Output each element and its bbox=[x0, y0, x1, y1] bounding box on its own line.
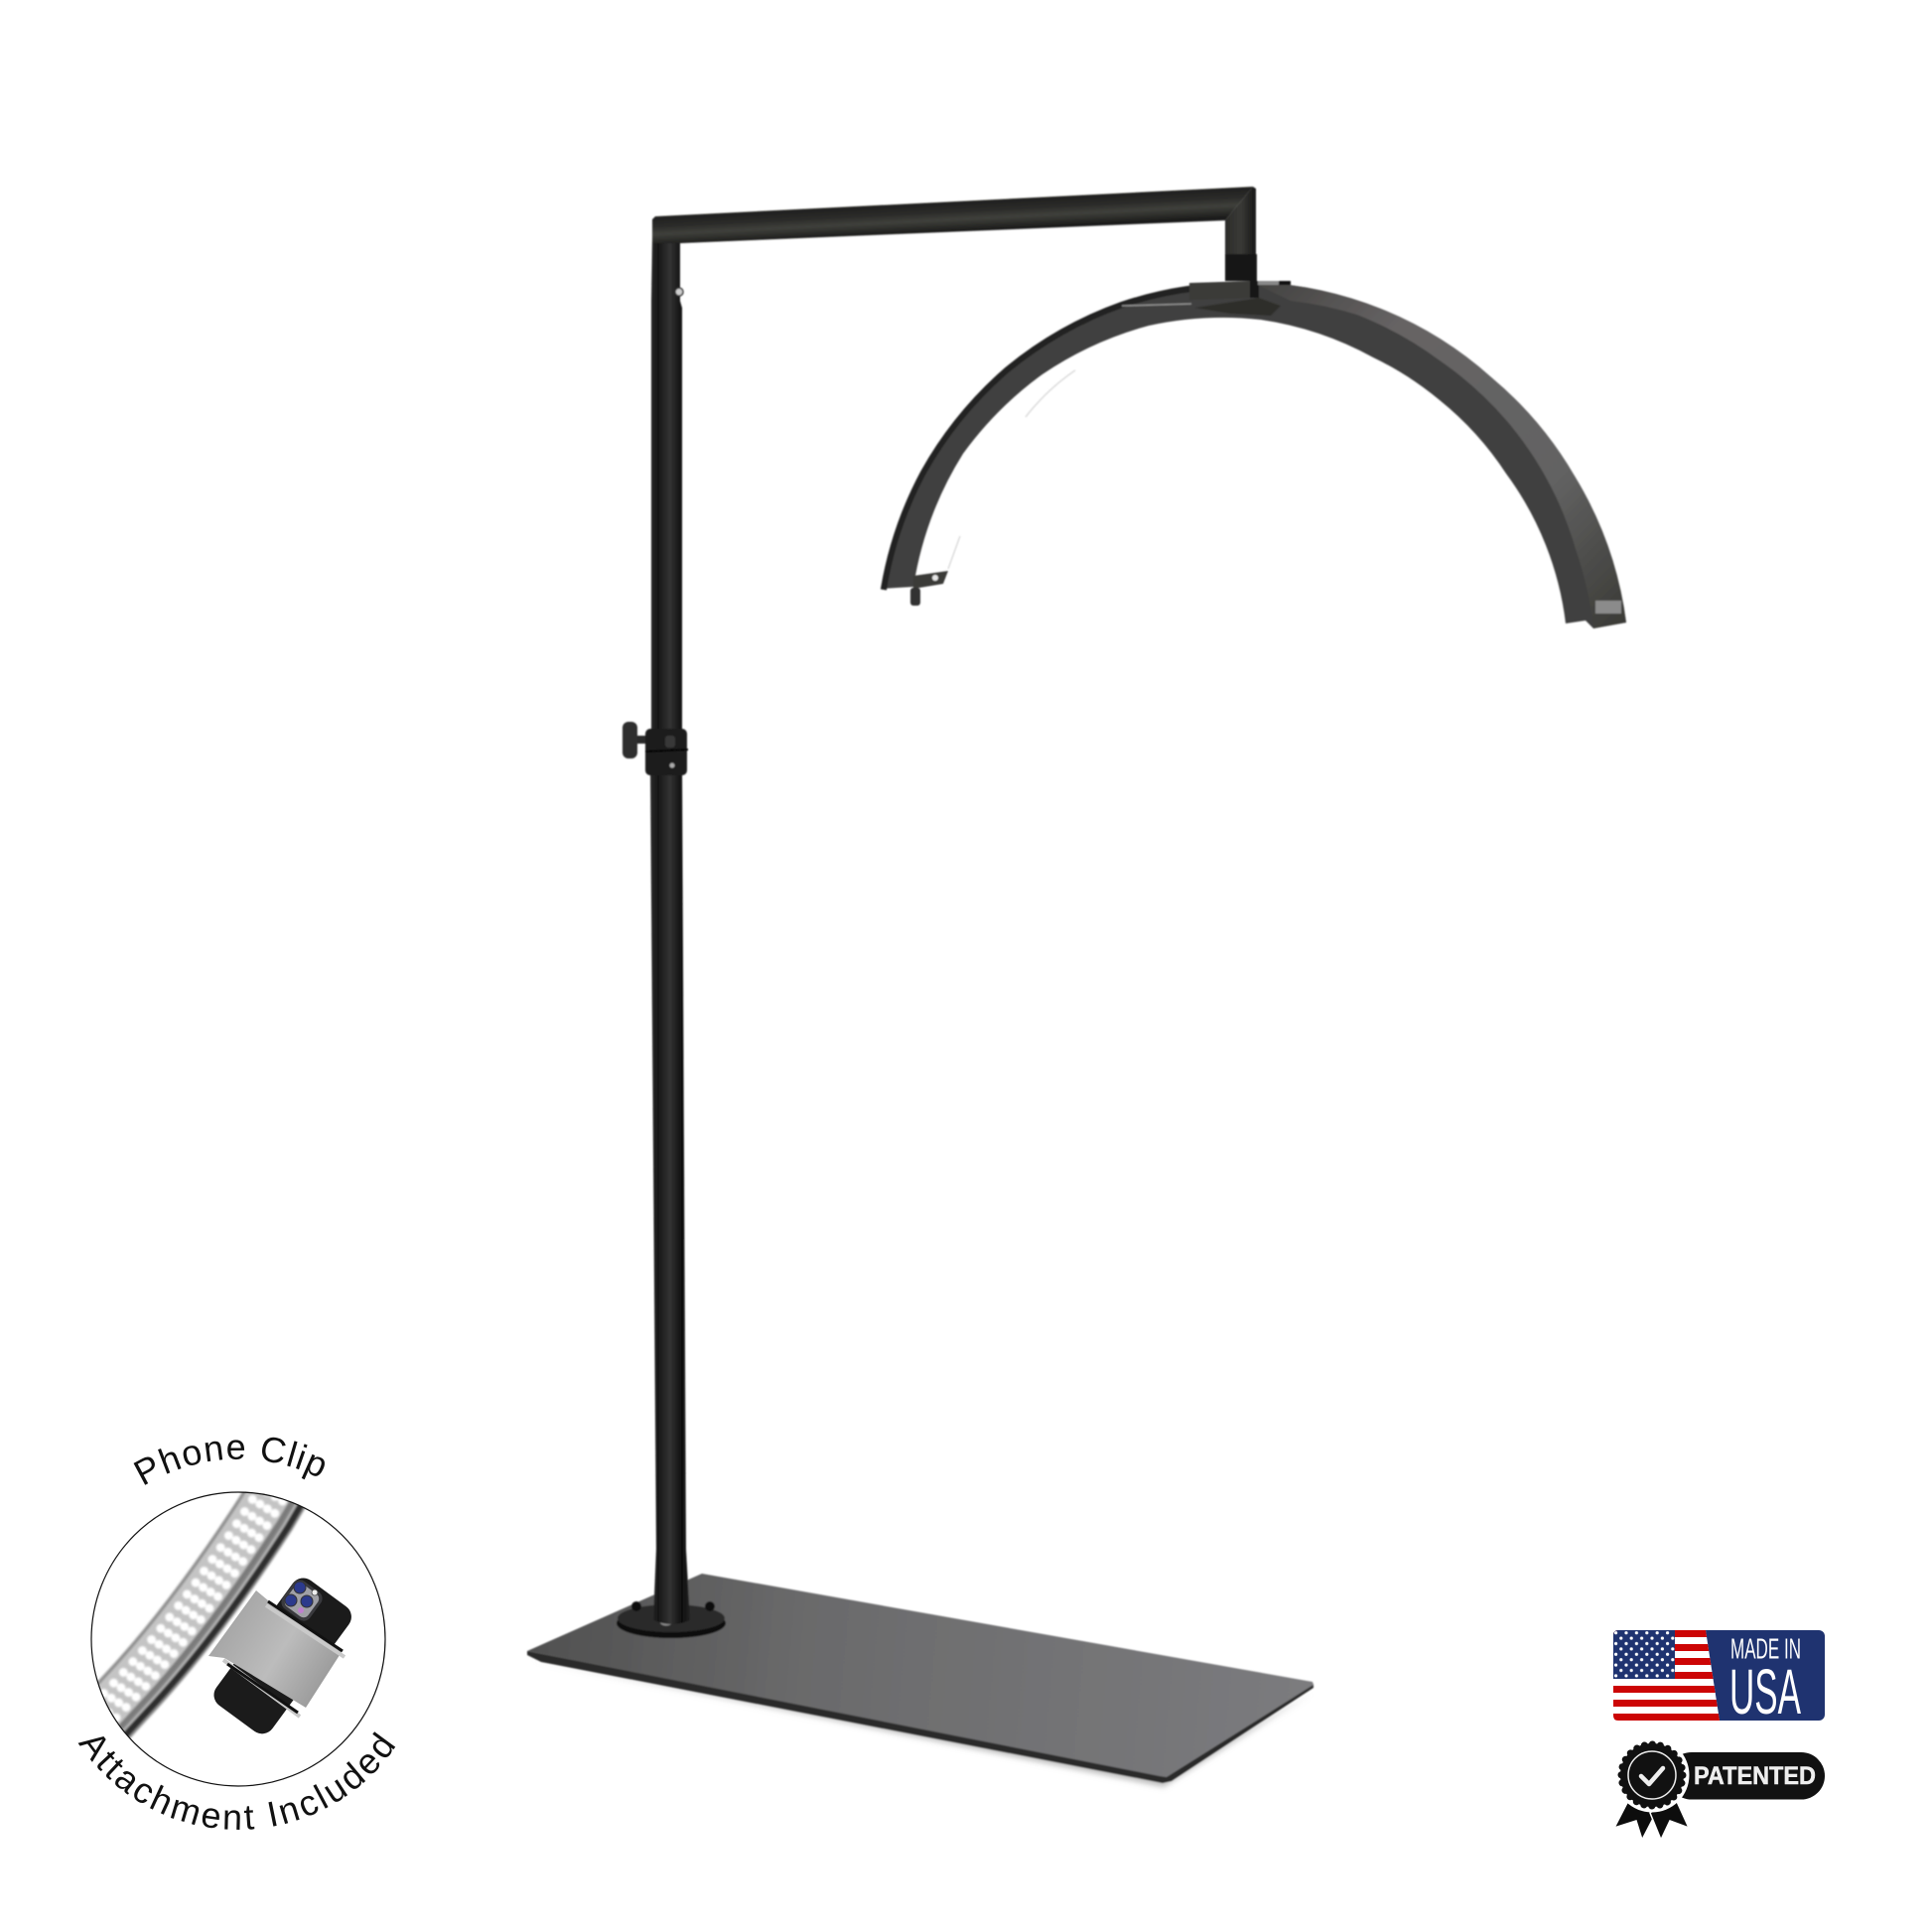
curved label: Attachment Included: Attachment Included bbox=[77, 1731, 395, 1830]
badge: patented bbox=[1614, 1737, 1825, 1840]
ring left dark rim bbox=[884, 288, 1199, 590]
base plate bbox=[527, 1574, 1313, 1787]
badge navy background bbox=[1613, 1630, 1825, 1721]
vertical pole bbox=[650, 238, 690, 1624]
arm drop section bbox=[1225, 187, 1256, 256]
phone camera module bbox=[278, 1577, 326, 1624]
seal with scalloped edge bbox=[1614, 1737, 1690, 1813]
clip lower strap bbox=[223, 1660, 300, 1717]
ring outer lit band bbox=[1252, 282, 1626, 628]
led strip frame bbox=[97, 1493, 306, 1739]
led dots bbox=[101, 1494, 288, 1723]
pole height clamp and knob bbox=[622, 722, 688, 775]
american flag bbox=[1613, 1630, 1723, 1721]
phone clip circular photo bbox=[84, 1475, 385, 1786]
lamp collar bbox=[1225, 254, 1257, 281]
lamp end connector bbox=[910, 571, 948, 606]
text: MADE IN: MADE IN bbox=[1730, 1634, 1801, 1666]
ribbon tails bbox=[1614, 1795, 1689, 1840]
infographic canvas bbox=[77, 186, 1825, 1838]
ring inner band bbox=[881, 282, 1626, 628]
badge: phone clip attachment bbox=[77, 1438, 395, 1830]
pole flange bbox=[617, 1601, 726, 1638]
text: USA: USA bbox=[1729, 1656, 1801, 1727]
pole pin bbox=[675, 288, 683, 296]
horizontal arm bbox=[652, 187, 1253, 243]
half-moon light ring bbox=[881, 282, 1626, 628]
curved label: Phone Clip: Phone Clip bbox=[133, 1438, 325, 1485]
patented pill bbox=[1668, 1752, 1825, 1799]
illustration clipped to circle bbox=[97, 1493, 306, 1739]
clip plate bbox=[208, 1590, 342, 1708]
ring model plate bbox=[1595, 601, 1621, 614]
circle outline bbox=[91, 1492, 385, 1786]
diffuser glints bbox=[948, 370, 1075, 569]
phone body bbox=[208, 1573, 356, 1738]
text: PATENTED: PATENTED bbox=[1694, 1762, 1816, 1790]
badge: made in USA bbox=[1613, 1630, 1825, 1727]
product: half moon lamp on stand bbox=[527, 187, 1626, 1787]
lamp top mount bracket bbox=[1122, 281, 1291, 316]
clip upper strap bbox=[266, 1601, 345, 1657]
